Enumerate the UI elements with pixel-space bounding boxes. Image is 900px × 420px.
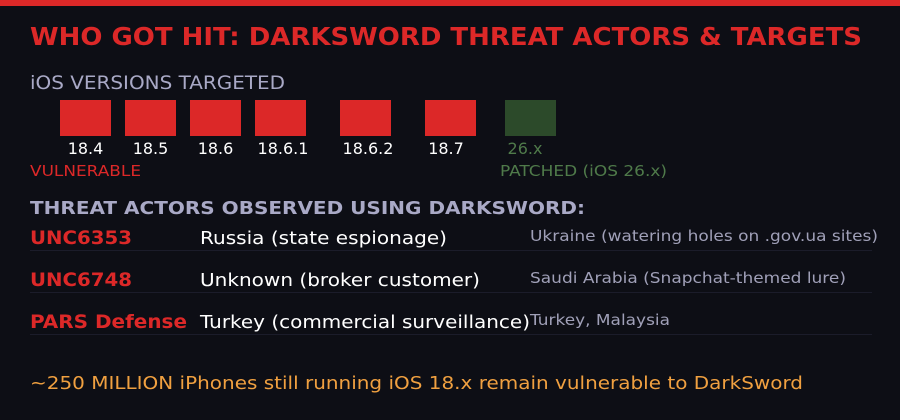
row: UNC6748: Unknown (broker customer) — [200, 270, 480, 291]
row: PARS Defense: Turkey (commercial surveillance) — [199, 312, 530, 333]
row: UNC6748 — [30, 269, 846, 291]
version chart: 26.x — [508, 139, 542, 158]
row: UNC6353 — [30, 227, 878, 249]
version chart: 18.6 — [198, 139, 233, 158]
version chart: 18.7 — [428, 139, 464, 158]
version chart: 18.5 — [133, 139, 168, 158]
version chart: 18.6.2 — [343, 139, 393, 158]
legend: patched: PATCHED (iOS 26.x) — [500, 162, 667, 180]
legend: vulnerable: VULNERABLE — [30, 162, 141, 180]
title: WHO GOT HIT: DARKSWORD THREAT ACTORS & TARGETS — [30, 22, 862, 51]
section heading: threat actors: THREAT ACTORS OBSERVED USING DARKSWORD: — [30, 198, 585, 219]
version chart: 18.6.1 — [258, 139, 308, 158]
row: UNC6353: Russia (state espionage) — [200, 228, 447, 249]
row: PARS Defense: Turkey, Malaysia — [529, 311, 670, 329]
row: UNC6748: Saudi Arabia (Snapchat-themed lure) — [530, 269, 846, 287]
row: PARS Defense — [30, 311, 670, 333]
threat actors table — [30, 227, 878, 334]
version chart: 18.4 — [68, 139, 103, 158]
row: UNC6353: Ukraine (watering holes on .gov.ua sites) — [530, 227, 878, 245]
footer callout: ~250 MILLION iPhones still running iOS 18.x remain vulnerable to DarkSword — [30, 373, 803, 394]
section heading: iOS versions: iOS VERSIONS TARGETED — [30, 72, 285, 94]
version chart — [60, 100, 556, 158]
row: UNC6748: UNC6748 — [30, 269, 132, 291]
row: PARS Defense: PARS Defense — [30, 311, 187, 333]
top accent bar — [0, 0, 900, 6]
row: UNC6353: UNC6353 — [30, 227, 132, 249]
